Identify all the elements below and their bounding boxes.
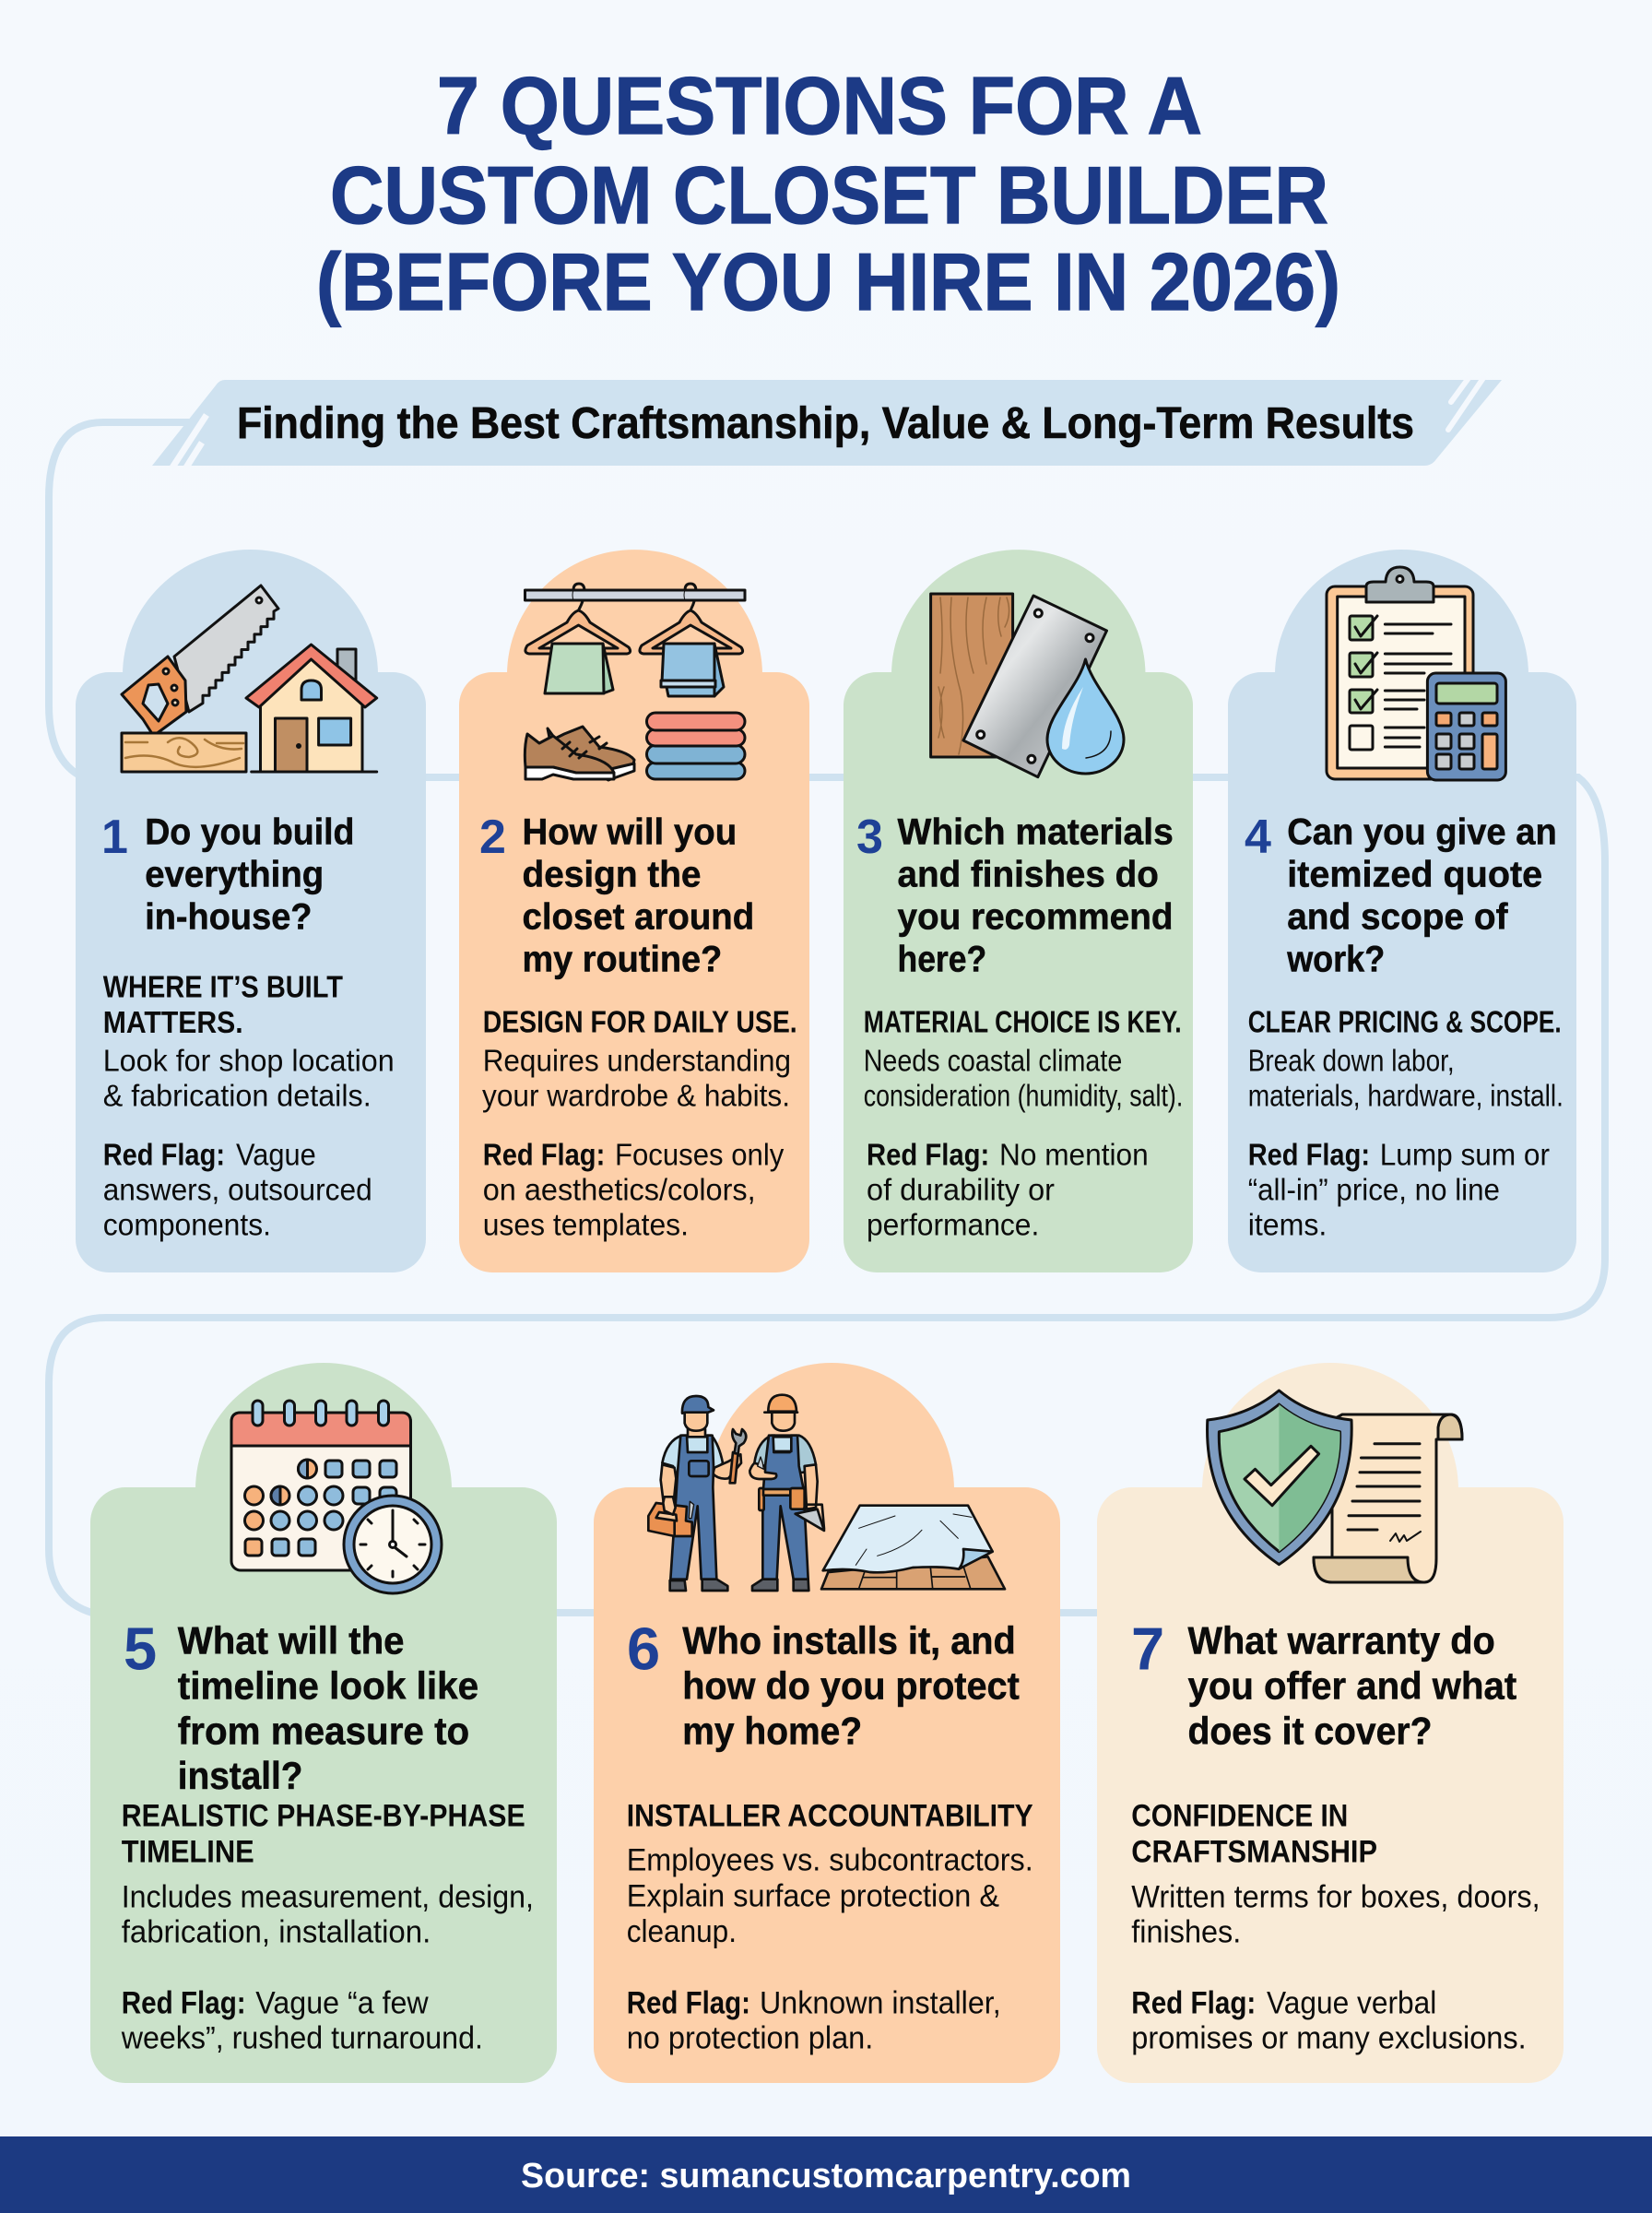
footer source bar xyxy=(0,2136,1652,2213)
number 2: 2 xyxy=(479,811,506,864)
red flag 5 xyxy=(121,1985,483,2056)
key point 7: finishes. xyxy=(1131,1915,1241,1950)
red flag 4: Red Flag: xyxy=(1248,1137,1370,1171)
question 7 xyxy=(1187,1618,1516,1753)
question 1 xyxy=(145,812,354,937)
question 2: How will you xyxy=(522,812,737,853)
worker two xyxy=(749,1395,824,1591)
footer source bar: Source: sumancustomcarpentry.com xyxy=(521,2157,1131,2195)
title xyxy=(316,60,1340,327)
panel: question 6 xyxy=(594,1363,1060,2083)
question 5: What will the xyxy=(178,1618,404,1662)
key point 5: Includes measurement, design, xyxy=(122,1879,534,1914)
key point 5: fabrication, installation. xyxy=(122,1915,431,1950)
question 4: Can you give an xyxy=(1287,812,1557,853)
question 1: Do you build xyxy=(145,812,354,853)
panel: question 5 xyxy=(90,1363,557,2083)
question 3: and finishes do xyxy=(898,855,1159,895)
red flag 5: Vague “a few xyxy=(255,1985,429,2020)
icon: two installers and protected floor xyxy=(648,1395,1005,1591)
key point 7: CRAFTSMANSHIP xyxy=(1131,1834,1377,1869)
red flag 6: Red Flag: xyxy=(627,1985,750,2020)
red flag 3: Red Flag: xyxy=(867,1137,989,1171)
panel: question 7 xyxy=(1097,1363,1564,2083)
subtitle banner: Finding the Best Craftsmanship, Value & Long-Term Results xyxy=(237,399,1414,448)
red flag 7 xyxy=(1131,1985,1527,2056)
red flag 1: answers, outsourced xyxy=(103,1173,372,1207)
key point 6: Employees vs. subcontractors. xyxy=(627,1842,1033,1877)
question 3: Which materials xyxy=(898,812,1174,853)
worker one xyxy=(648,1396,746,1591)
question 4: and scope of xyxy=(1287,896,1508,937)
question 6: how do you protect xyxy=(682,1663,1020,1707)
key point 7 xyxy=(1131,1799,1540,1950)
key point 3: Needs coastal climate xyxy=(864,1044,1122,1078)
key point 4: Break down labor, xyxy=(1248,1044,1455,1078)
number 1: 1 xyxy=(101,811,128,864)
key point 2: Requires understanding xyxy=(483,1044,791,1078)
red flag 7: promises or many exclusions. xyxy=(1131,2021,1527,2056)
red flag 5: Red Flag: xyxy=(122,1985,246,2020)
red flag 3: of durability or xyxy=(867,1173,1055,1207)
red flag 3: performance. xyxy=(867,1207,1039,1241)
red flag 3: No mention xyxy=(999,1137,1149,1171)
red flag 6: no protection plan. xyxy=(627,2021,873,2056)
card shape xyxy=(594,1363,1060,2083)
card shape xyxy=(90,1363,557,2083)
panel: question 3 xyxy=(844,550,1193,1272)
question 6: Who installs it, and xyxy=(682,1618,1016,1662)
key point 2: your wardrobe & habits. xyxy=(482,1078,790,1112)
key point 6: INSTALLER ACCOUNTABILITY xyxy=(627,1799,1033,1834)
title: (BEFORE YOU HIRE IN 2026) xyxy=(316,236,1340,327)
card shape xyxy=(1228,550,1576,1272)
question 4 xyxy=(1286,812,1557,979)
red flag 6 xyxy=(627,1985,1001,2056)
icon: wood, metal and water drop xyxy=(931,594,1124,777)
panel: question 2 xyxy=(459,550,809,1272)
key point 5: REALISTIC PHASE-BY-PHASE xyxy=(122,1799,525,1834)
question 5: from measure to xyxy=(178,1710,469,1753)
key point 3 xyxy=(864,1004,1183,1112)
question 7: you offer and what xyxy=(1187,1663,1516,1707)
number 6: 6 xyxy=(627,1615,660,1683)
question 3 xyxy=(898,812,1174,979)
question 2: my routine? xyxy=(522,939,722,979)
number 7: 7 xyxy=(1131,1615,1164,1683)
red flag 7: Vague verbal xyxy=(1267,1985,1436,2020)
key point 4: materials, hardware, install. xyxy=(1248,1078,1564,1112)
card shape xyxy=(459,550,809,1272)
red flag 2: Focuses only xyxy=(615,1137,785,1171)
key point 7: Written terms for boxes, doors, xyxy=(1131,1879,1540,1914)
red flag 1 xyxy=(103,1137,372,1241)
subtitle banner xyxy=(152,378,1502,467)
question 2: design the xyxy=(522,855,701,895)
red flag 1: Red Flag: xyxy=(103,1137,225,1171)
key point 1: Look for shop location xyxy=(103,1044,395,1078)
key point 3: MATERIAL CHOICE IS KEY. xyxy=(864,1004,1182,1038)
red flag 1: components. xyxy=(103,1207,271,1241)
panel: question 4 xyxy=(1228,550,1576,1272)
key point 5 xyxy=(122,1799,534,1950)
key point 6: Explain surface protection & xyxy=(627,1879,999,1914)
red flag 3 xyxy=(867,1137,1149,1241)
question 4: work? xyxy=(1286,939,1385,979)
red flag 6: Unknown installer, xyxy=(760,1985,1001,2020)
question 1: everything xyxy=(145,855,324,895)
question 4: itemized quote xyxy=(1287,855,1542,895)
key point 4: CLEAR PRICING & SCOPE. xyxy=(1248,1004,1562,1038)
red flag 4: items. xyxy=(1248,1207,1327,1241)
key point 6: cleanup. xyxy=(627,1914,737,1949)
key point 6 xyxy=(627,1799,1033,1949)
icon: calendar and clock xyxy=(231,1401,442,1593)
red flag 4: Lump sum or xyxy=(1380,1137,1550,1171)
key point 5: TIMELINE xyxy=(122,1834,254,1869)
key point 1 xyxy=(103,970,395,1112)
question 2: closet around xyxy=(522,896,754,937)
title: CUSTOM CLOSET BUILDER xyxy=(330,149,1328,241)
red flag 1: Vague xyxy=(236,1137,316,1171)
question 5: timeline look like xyxy=(178,1663,478,1707)
question 5: install? xyxy=(178,1754,302,1797)
icon: hangers, towels, shoes and folded linens xyxy=(525,584,745,780)
key point 1: WHERE IT’S BUILT xyxy=(103,970,343,1004)
red flag 2: uses templates. xyxy=(483,1207,689,1241)
question 7: does it cover? xyxy=(1187,1710,1433,1753)
red flag 7: Red Flag: xyxy=(1131,1985,1256,2020)
question 1: in-house? xyxy=(145,896,312,937)
question 6: my home? xyxy=(682,1710,862,1753)
red flag 2: Red Flag: xyxy=(483,1137,605,1171)
icon: shield and warranty scroll xyxy=(1208,1391,1462,1582)
red flag 2: on aesthetics/colors, xyxy=(483,1173,756,1207)
title: 7 QUESTIONS FOR A xyxy=(437,60,1202,151)
card shape xyxy=(1097,1363,1564,2083)
card shape xyxy=(844,550,1193,1272)
question 2 xyxy=(522,812,754,979)
key point 1: MATTERS. xyxy=(103,1005,243,1039)
question 7: What warranty do xyxy=(1187,1618,1495,1662)
question 5 xyxy=(178,1618,478,1797)
card shape xyxy=(76,550,426,1272)
red flag 4 xyxy=(1248,1137,1550,1241)
key point 7: CONFIDENCE IN xyxy=(1131,1799,1348,1834)
icon: clipboard checklist and calculator xyxy=(1327,567,1505,780)
key point 4 xyxy=(1248,1004,1564,1112)
panel: question 1 xyxy=(76,550,426,1272)
key point 2 xyxy=(482,1004,797,1112)
number 5: 5 xyxy=(124,1615,157,1683)
red flag 4: “all-in” price, no line xyxy=(1248,1173,1500,1207)
red flag 5: weeks”, rushed turnaround. xyxy=(121,2021,483,2056)
icon: saw, lumber and house xyxy=(122,586,377,772)
question 3: you recommend xyxy=(898,896,1173,937)
key point 1: & fabrication details. xyxy=(103,1078,372,1112)
key point 3: consideration (humidity, salt). xyxy=(864,1078,1183,1112)
question 6 xyxy=(682,1618,1020,1753)
connector path linking the cards xyxy=(49,422,1605,1613)
number 4: 4 xyxy=(1245,811,1271,864)
question 3: here? xyxy=(898,939,986,979)
red flag 2 xyxy=(483,1137,785,1241)
number 3: 3 xyxy=(856,811,883,864)
protected floor xyxy=(821,1506,1005,1589)
key point 2: DESIGN FOR DAILY USE. xyxy=(483,1004,797,1038)
